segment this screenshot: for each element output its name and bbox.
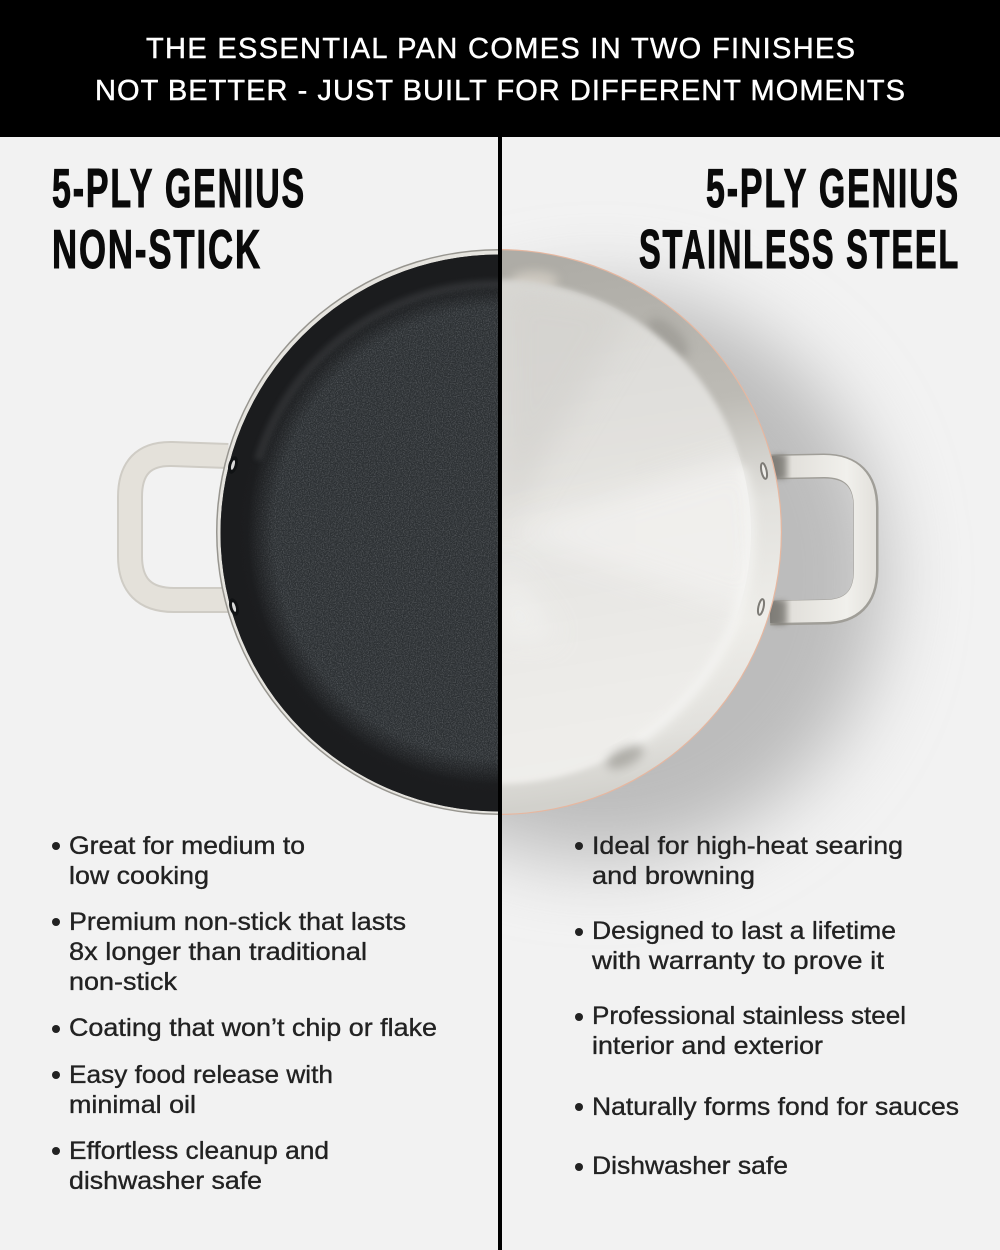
bullet list: non-stick: minimal oil [69,1091,196,1119]
bullet list: non-stick: Easy food release with [69,1061,333,1089]
icon: left pan handle [130,454,228,600]
stainless pan half [502,249,782,815]
brushed steel floor [502,278,754,785]
header line 1: THE ESSENTIAL PAN COMES IN TWO FINISHES [146,33,855,65]
icon: rivets [757,463,768,615]
stainless floor smudge [603,740,647,774]
bullet list: stainless steel: interior and exterior [592,1032,823,1060]
bullet list: non-stick [52,832,437,1195]
non-stick interior [215,250,505,820]
header banner [0,0,1000,137]
heading: non-stick [52,157,306,280]
bullet list: non-stick: Premium non-stick that lasts [69,908,406,936]
header line 2: NOT BETTER - JUST BUILT FOR DIFFERENT MOMENTS [95,75,905,107]
bullet list: stainless steel [575,832,959,1180]
bullet list: non-stick: non-stick [69,968,178,996]
bullet list: non-stick: Great for medium to [69,832,305,860]
bullet list: stainless steel: Ideal for high-heat searing [592,832,903,860]
bullet list: non-stick: low cooking [69,862,209,890]
icon: right pan handle [770,455,866,625]
bullet list: stainless steel: Designed to last a lifetime [592,917,896,945]
bullet list: stainless steel: and browning [592,862,755,890]
non-stick pan half [216,249,498,815]
stainless rim smudges [510,271,695,365]
bullet list: non-stick: Coating that won’t chip or flake [69,1014,437,1042]
bullet list: non-stick: 8x longer than traditional [69,938,367,966]
pan drop shadow, stainless side [502,254,921,896]
bullet list: non-stick: dishwasher safe [69,1167,262,1195]
bullet list: stainless steel: with warranty to prove it [591,947,884,975]
icon: rivets [228,456,239,616]
bullet list: stainless steel: Professional stainless steel [592,1002,906,1030]
bullet list: stainless steel: Dishwasher safe [592,1152,788,1180]
heading: stainless steel [639,157,960,280]
centre divider [498,137,502,1250]
heading: non-stick: 5-PLY GENIUS [52,157,306,219]
heading: non-stick: NON-STICK [52,218,262,280]
bullet list: non-stick: Effortless cleanup and [69,1137,329,1165]
bullet list: stainless steel: Naturally forms fond for sauces [592,1093,959,1121]
